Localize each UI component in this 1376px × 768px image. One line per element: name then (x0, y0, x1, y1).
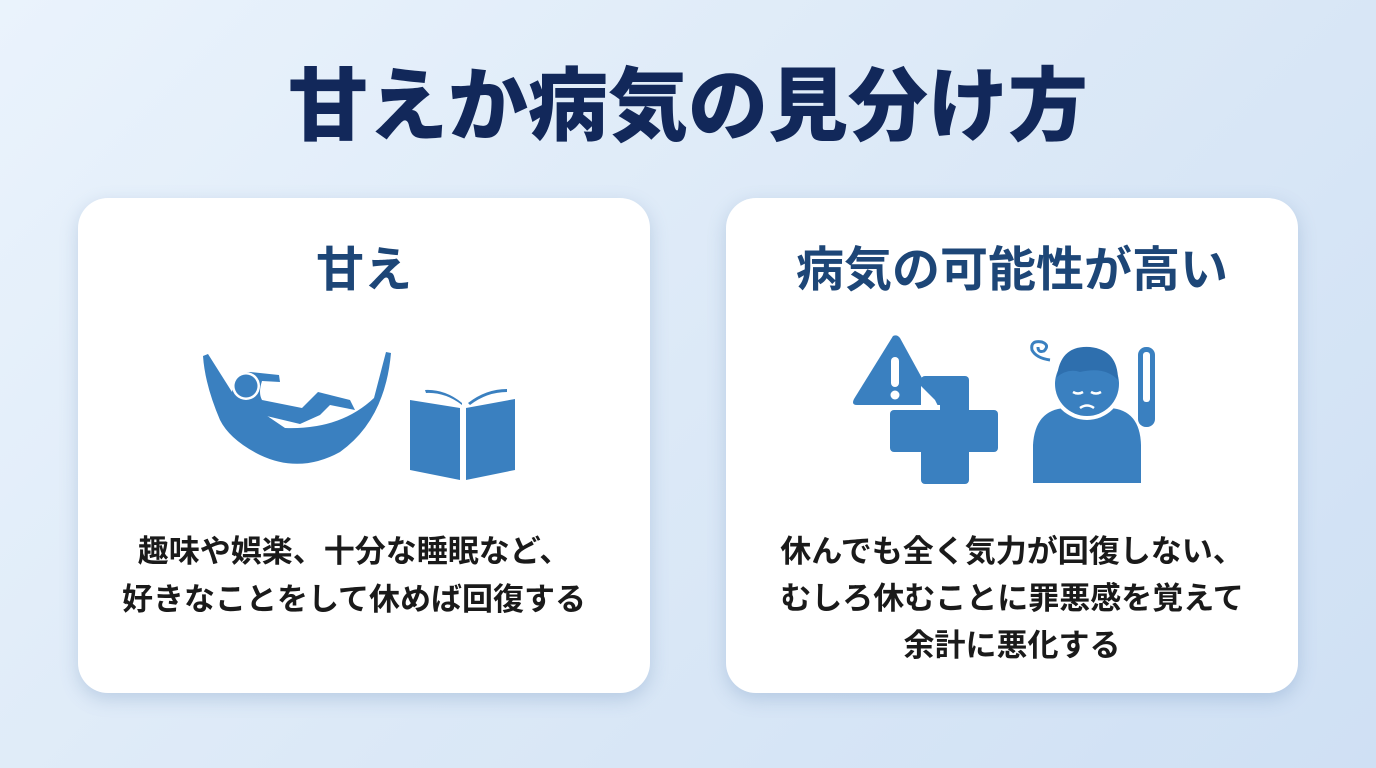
icon: hammock (203, 352, 391, 464)
text: illness (780, 534, 1244, 663)
heading: amae: 甘え (316, 244, 412, 297)
icon: sick person with thermometer (1032, 342, 1155, 483)
panel: illness (726, 198, 1298, 693)
heading: illness: 病気の可能性が高い (796, 244, 1228, 297)
text: illness: むしろ休むことに罪悪感を覚えて (780, 581, 1244, 616)
icon: warning and cross (853, 335, 998, 484)
text: illness: 余計に悪化する (904, 628, 1120, 663)
panel: amae (78, 198, 650, 693)
text: illness: 休んでも全く気力が回復しない、 (780, 534, 1244, 569)
text: amae: 趣味や娯楽、十分な睡眠など、 (138, 534, 570, 569)
title: 甘えか病気の見分け方 (288, 62, 1088, 151)
icon: book (410, 389, 515, 480)
text: amae: 好きなことをして休めば回復する (122, 582, 586, 617)
text: amae (122, 534, 586, 617)
